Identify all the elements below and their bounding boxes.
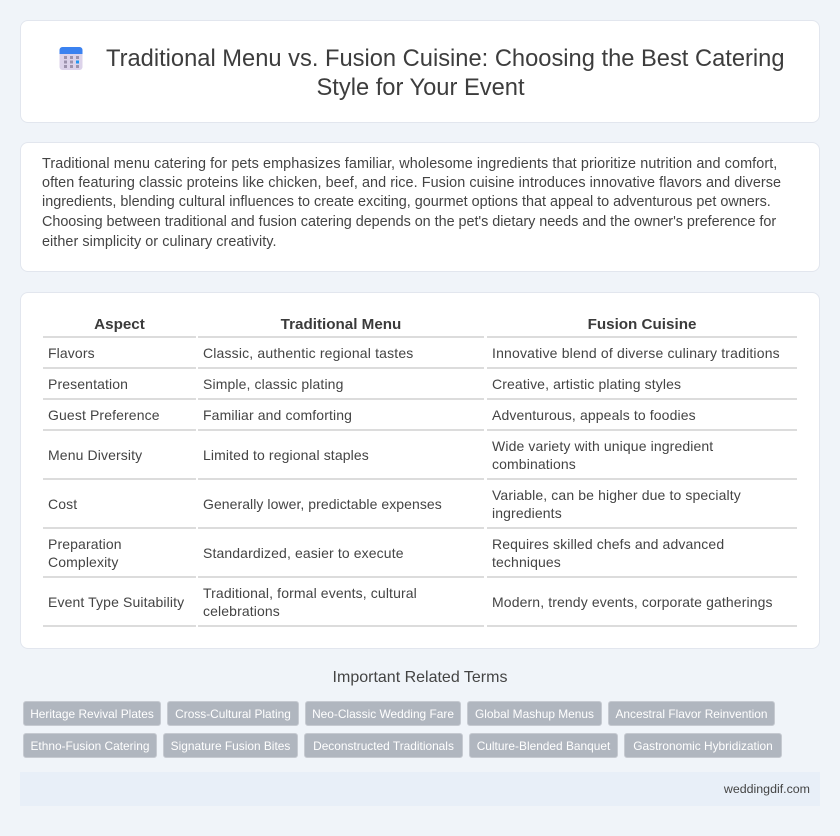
intro panel [20, 142, 820, 272]
comparison table: Flavors [48, 345, 95, 361]
comparison table: Cost [48, 496, 77, 512]
related term tags: Signature Fusion Bites [171, 739, 290, 753]
comparison table: Aspect [94, 316, 145, 333]
comparison table: Menu Diversity [48, 447, 142, 463]
comparison table: Traditional Menu [281, 316, 401, 333]
comparison table: Familiar and comforting [203, 407, 352, 423]
intro text: ingredients, blending cultural influences to create exciting, gourmet options that appeal to adventurous pet owners. [42, 194, 771, 210]
comparison table [43, 316, 797, 627]
source credit: weddingdif.com [724, 782, 810, 796]
related term tags: Heritage Revival Plates [30, 707, 154, 721]
intro text: often featuring classic proteins like chicken, beef, and rice. Fusion cuisine introduces innovative flavors and diverse [42, 175, 781, 191]
related term tags: Deconstructed Traditionals [313, 739, 454, 753]
related term tags: Cross-Cultural Plating [175, 707, 291, 721]
related term tags: Neo-Classic Wedding Fare [312, 707, 454, 721]
related term tags [23, 701, 782, 758]
title [106, 46, 785, 101]
comparison table: celebrations [203, 603, 280, 619]
comparison table: Guest Preference [48, 407, 160, 423]
footer bar [20, 772, 820, 806]
comparison table: Wide variety with unique ingredient [492, 438, 713, 454]
comparison table: Presentation [48, 376, 128, 392]
related term tags: Culture-Blended Banquet [477, 739, 610, 753]
intro text: Choosing between traditional and fusion catering depends on the pet's dietary needs and the owner's preference for [42, 214, 776, 230]
comparison table: Preparation [48, 536, 122, 552]
comparison table: Fusion Cuisine [588, 316, 696, 333]
comparison table: Complexity [48, 554, 118, 570]
related terms heading: Important Related Terms [333, 669, 507, 686]
comparison table: techniques [492, 554, 561, 570]
related term tags: Ancestral Flavor Reinvention [615, 707, 768, 721]
comparison table: Requires skilled chefs and advanced [492, 536, 724, 552]
comparison table: Traditional, formal events, cultural [203, 585, 417, 601]
comparison table: Event Type Suitability [48, 594, 184, 610]
comparison table: Limited to regional staples [203, 447, 369, 463]
comparison table: Variable, can be higher due to specialty [492, 487, 741, 503]
comparison table: Creative, artistic plating styles [492, 376, 681, 392]
intro text: either simplicity or culinary creativity. [42, 234, 276, 250]
related term tags: Global Mashup Menus [475, 707, 594, 721]
comparison table: Generally lower, predictable expenses [203, 496, 442, 512]
header panel [20, 20, 820, 123]
icon: calendar [60, 47, 82, 70]
intro text [42, 156, 781, 250]
intro text: Traditional menu catering for pets emphasizes familiar, wholesome ingredients that prioritize nutrition and comfort, [42, 156, 777, 172]
comparison table: Modern, trendy events, corporate gatherings [492, 594, 773, 610]
comparison table: Standardized, easier to execute [203, 545, 404, 561]
comparison table: ingredients [492, 505, 562, 521]
title: Style for Your Event [316, 75, 525, 101]
comparison table: combinations [492, 456, 576, 472]
comparison table: Innovative blend of diverse culinary traditions [492, 345, 780, 361]
related term tags: Gastronomic Hybridization [633, 739, 773, 753]
comparison table: Classic, authentic regional tastes [203, 345, 413, 361]
comparison table: Adventurous, appeals to foodies [492, 407, 696, 423]
comparison table: Simple, classic plating [203, 376, 343, 392]
title: Traditional Menu vs. Fusion Cuisine: Choosing the Best Catering [106, 46, 785, 72]
related term tags: Ethno-Fusion Catering [30, 739, 149, 753]
comparison table panel [20, 292, 820, 649]
